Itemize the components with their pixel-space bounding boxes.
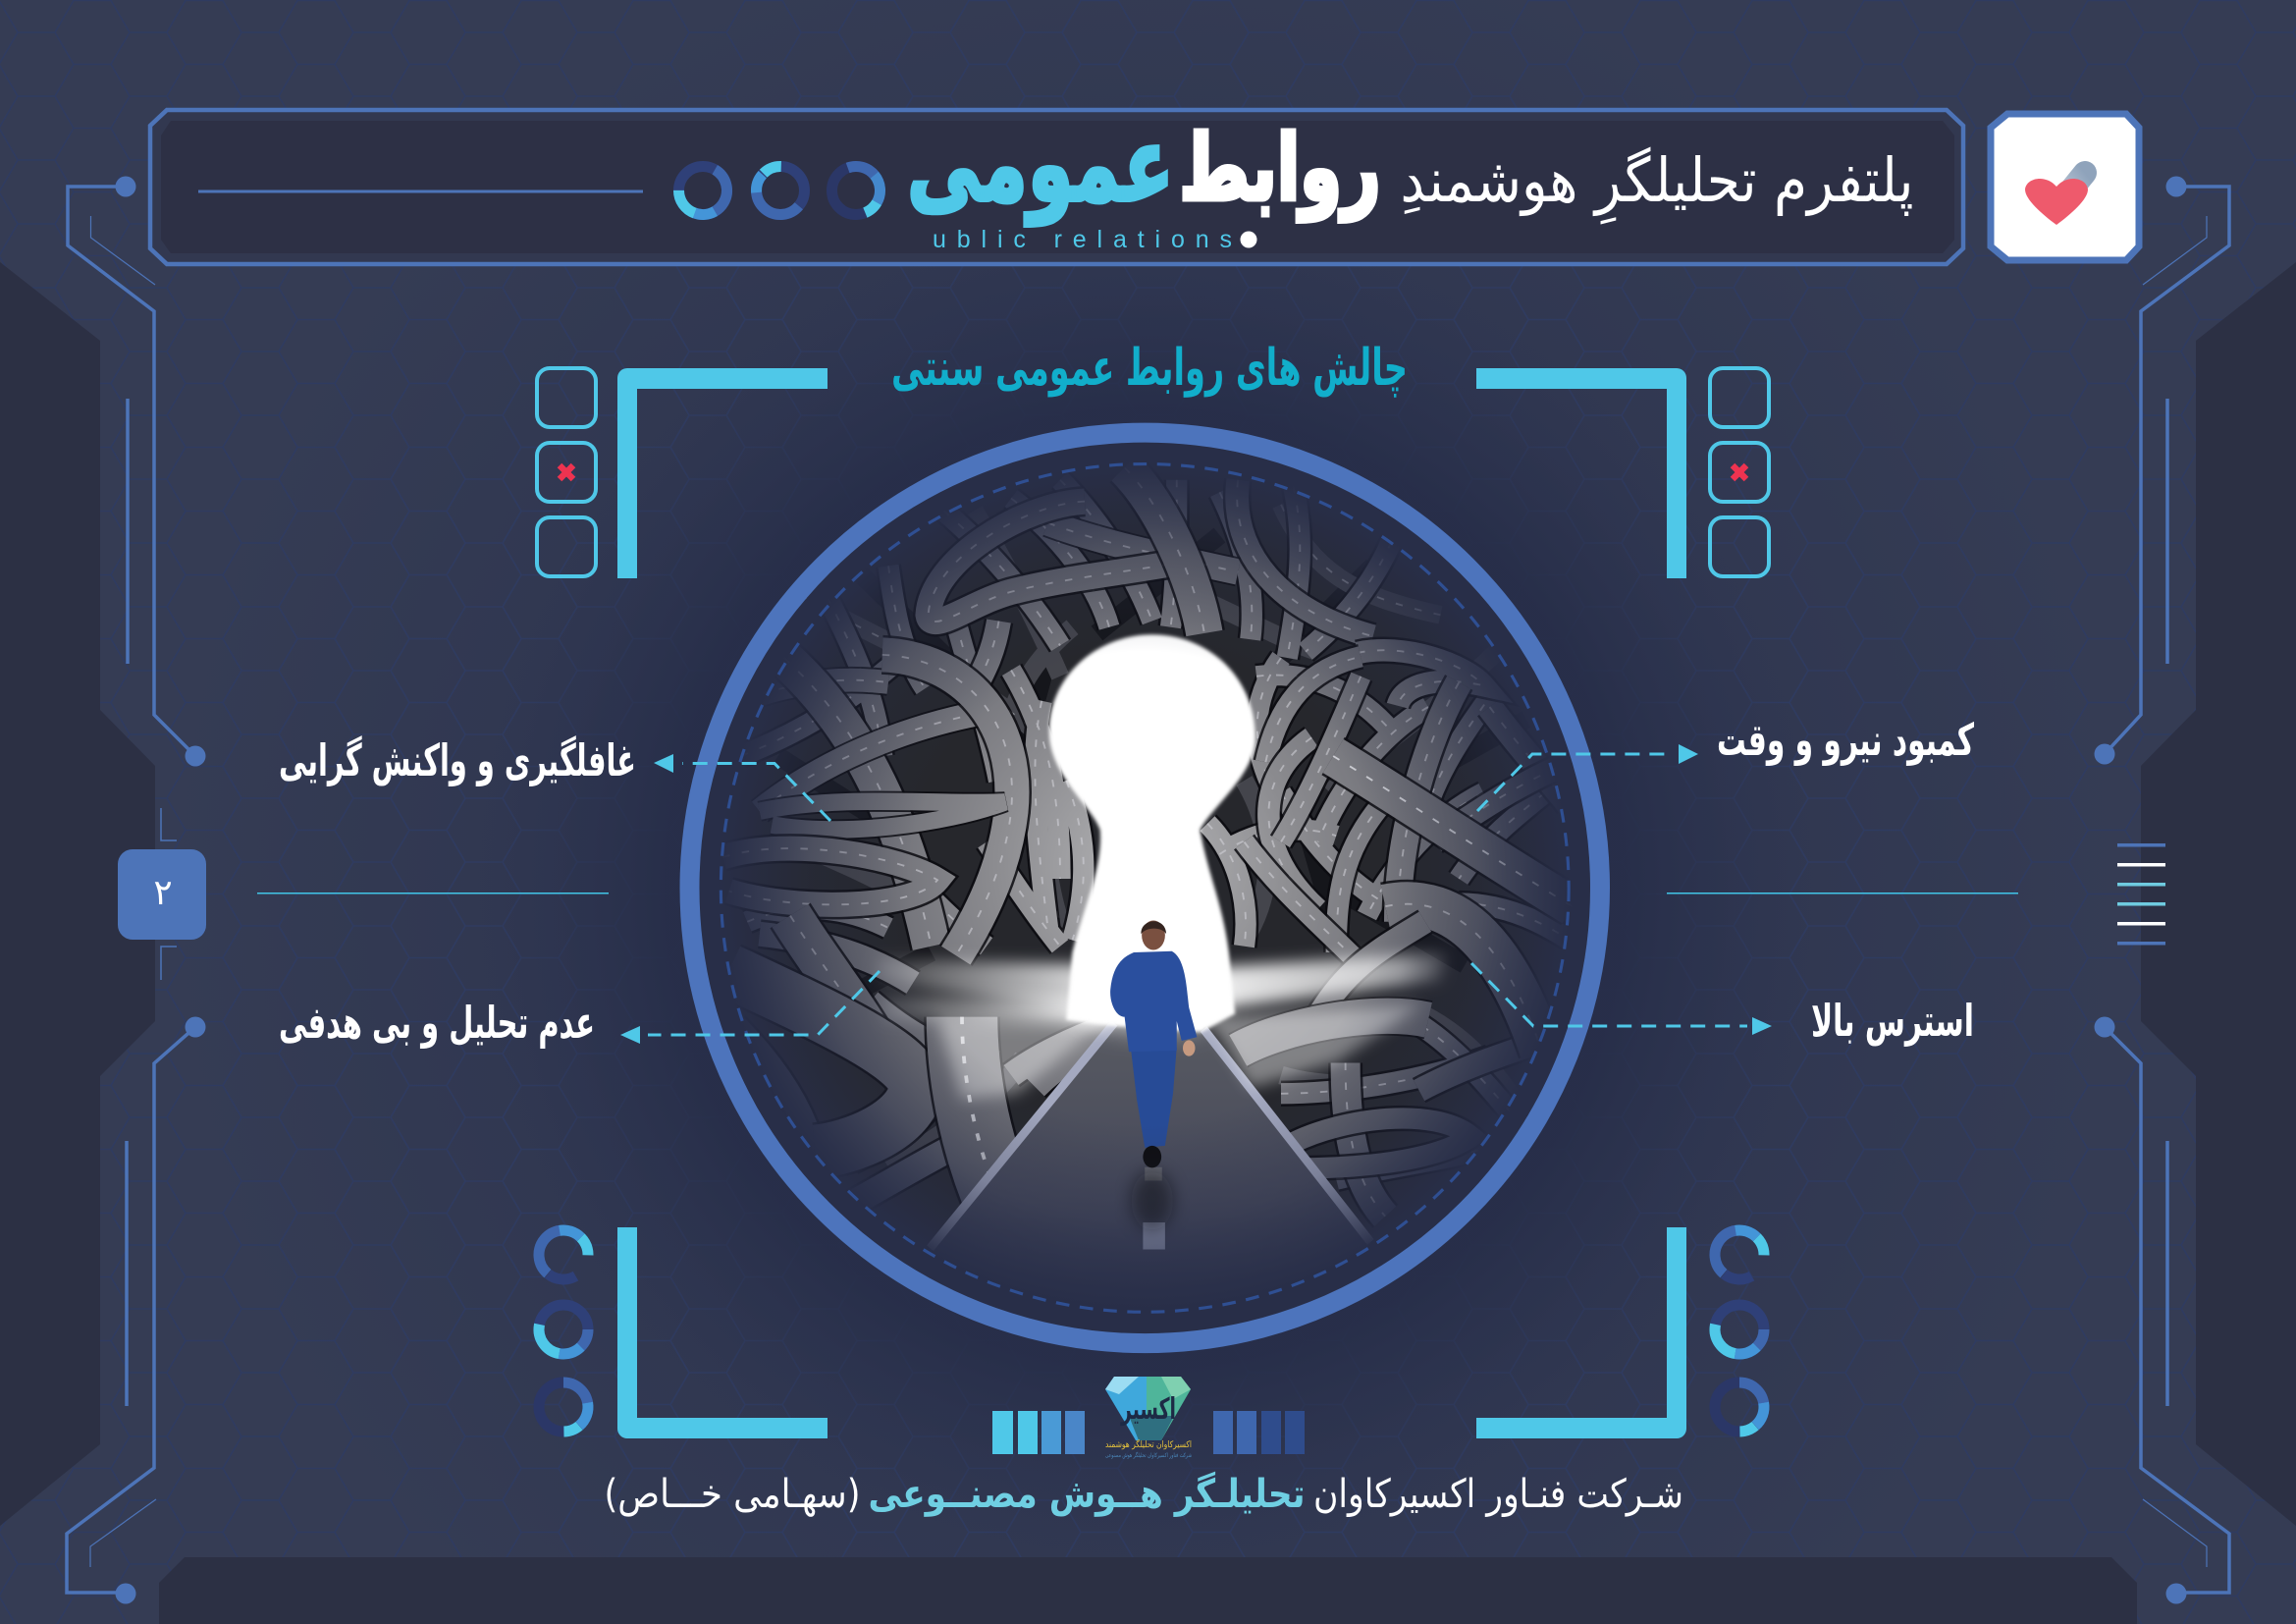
image vignette <box>699 443 1590 1333</box>
page number tab <box>118 808 206 980</box>
circuit: lower right <box>2095 1017 2229 1604</box>
page number tab: ۲ <box>153 873 173 913</box>
walking man <box>1110 921 1197 1230</box>
logo word: public: عمومی <box>907 104 1174 226</box>
corner bracket: bottom right <box>1476 1227 1686 1438</box>
logo subtitle: ublic relations <box>933 226 1232 253</box>
company logo: شرکت فناور اکسیرکاوان تحلیلگر هوش مصنوعی <box>1105 1451 1192 1459</box>
header title: پلتفرم تحلیلگرِ هوشمندِ <box>1400 144 1914 225</box>
ring indicators: bottom left <box>529 1220 598 1441</box>
header ring indicators <box>670 156 890 225</box>
label: bottom left: عدم تحلیل و بی هدفی <box>279 997 595 1049</box>
footer company name: (سهـامی خـــاص) <box>605 1472 860 1517</box>
check boxes: left <box>537 368 596 576</box>
outer ring <box>689 433 1600 1343</box>
footer company name: شـرکت فنـاور اکسیرکاوان <box>1313 1472 1683 1517</box>
menu lines <box>2117 843 2165 945</box>
circuit: upper left <box>68 177 206 766</box>
heading: چالش های روابط عمومی سنتی <box>891 339 1408 398</box>
bars: right <box>1213 1411 1305 1454</box>
logo word: relations: روابط <box>1180 116 1380 222</box>
icon: heart check card <box>1991 114 2139 260</box>
tangled roads <box>722 467 1573 1217</box>
label: top left: غافلگیری و واکنش گرایی <box>279 734 636 786</box>
footer company name: تحلیلـگر هــوش مصنــوعی <box>868 1471 1306 1517</box>
arrow: top right <box>1477 744 1698 811</box>
central keyhole illustration <box>689 433 1600 1343</box>
corner bracket: top right <box>1476 368 1686 578</box>
label: bottom right: استرس بالا <box>1811 995 1974 1047</box>
header line <box>198 190 643 192</box>
road to keyhole <box>924 1023 1379 1288</box>
company logo <box>1105 1377 1192 1459</box>
label: top right: کمبود نیرو و وقت <box>1717 714 1975 766</box>
logo dot <box>1241 232 1256 247</box>
check boxes: right <box>1710 368 1769 576</box>
header panel <box>150 104 1963 264</box>
dashed inner ring <box>721 463 1569 1312</box>
company logo: اکسیرکاوان تحلیلگر هوشمند <box>1105 1438 1192 1450</box>
company logo: اکسیر <box>1120 1392 1176 1427</box>
keyhole light <box>1049 634 1255 1032</box>
bars: left <box>992 1411 1085 1454</box>
arrow: bottom left <box>620 971 880 1044</box>
footer company name <box>605 1471 1683 1517</box>
corner bracket: bottom left <box>617 1227 828 1438</box>
corner bracket: top left <box>617 368 828 578</box>
light beams <box>876 952 1447 1100</box>
circuit: upper right <box>2095 177 2229 764</box>
arrow: bottom right <box>1471 963 1772 1035</box>
circuit: lower left <box>67 1017 206 1604</box>
ring indicators: bottom right <box>1705 1220 1774 1441</box>
arrow: top left <box>654 754 830 821</box>
